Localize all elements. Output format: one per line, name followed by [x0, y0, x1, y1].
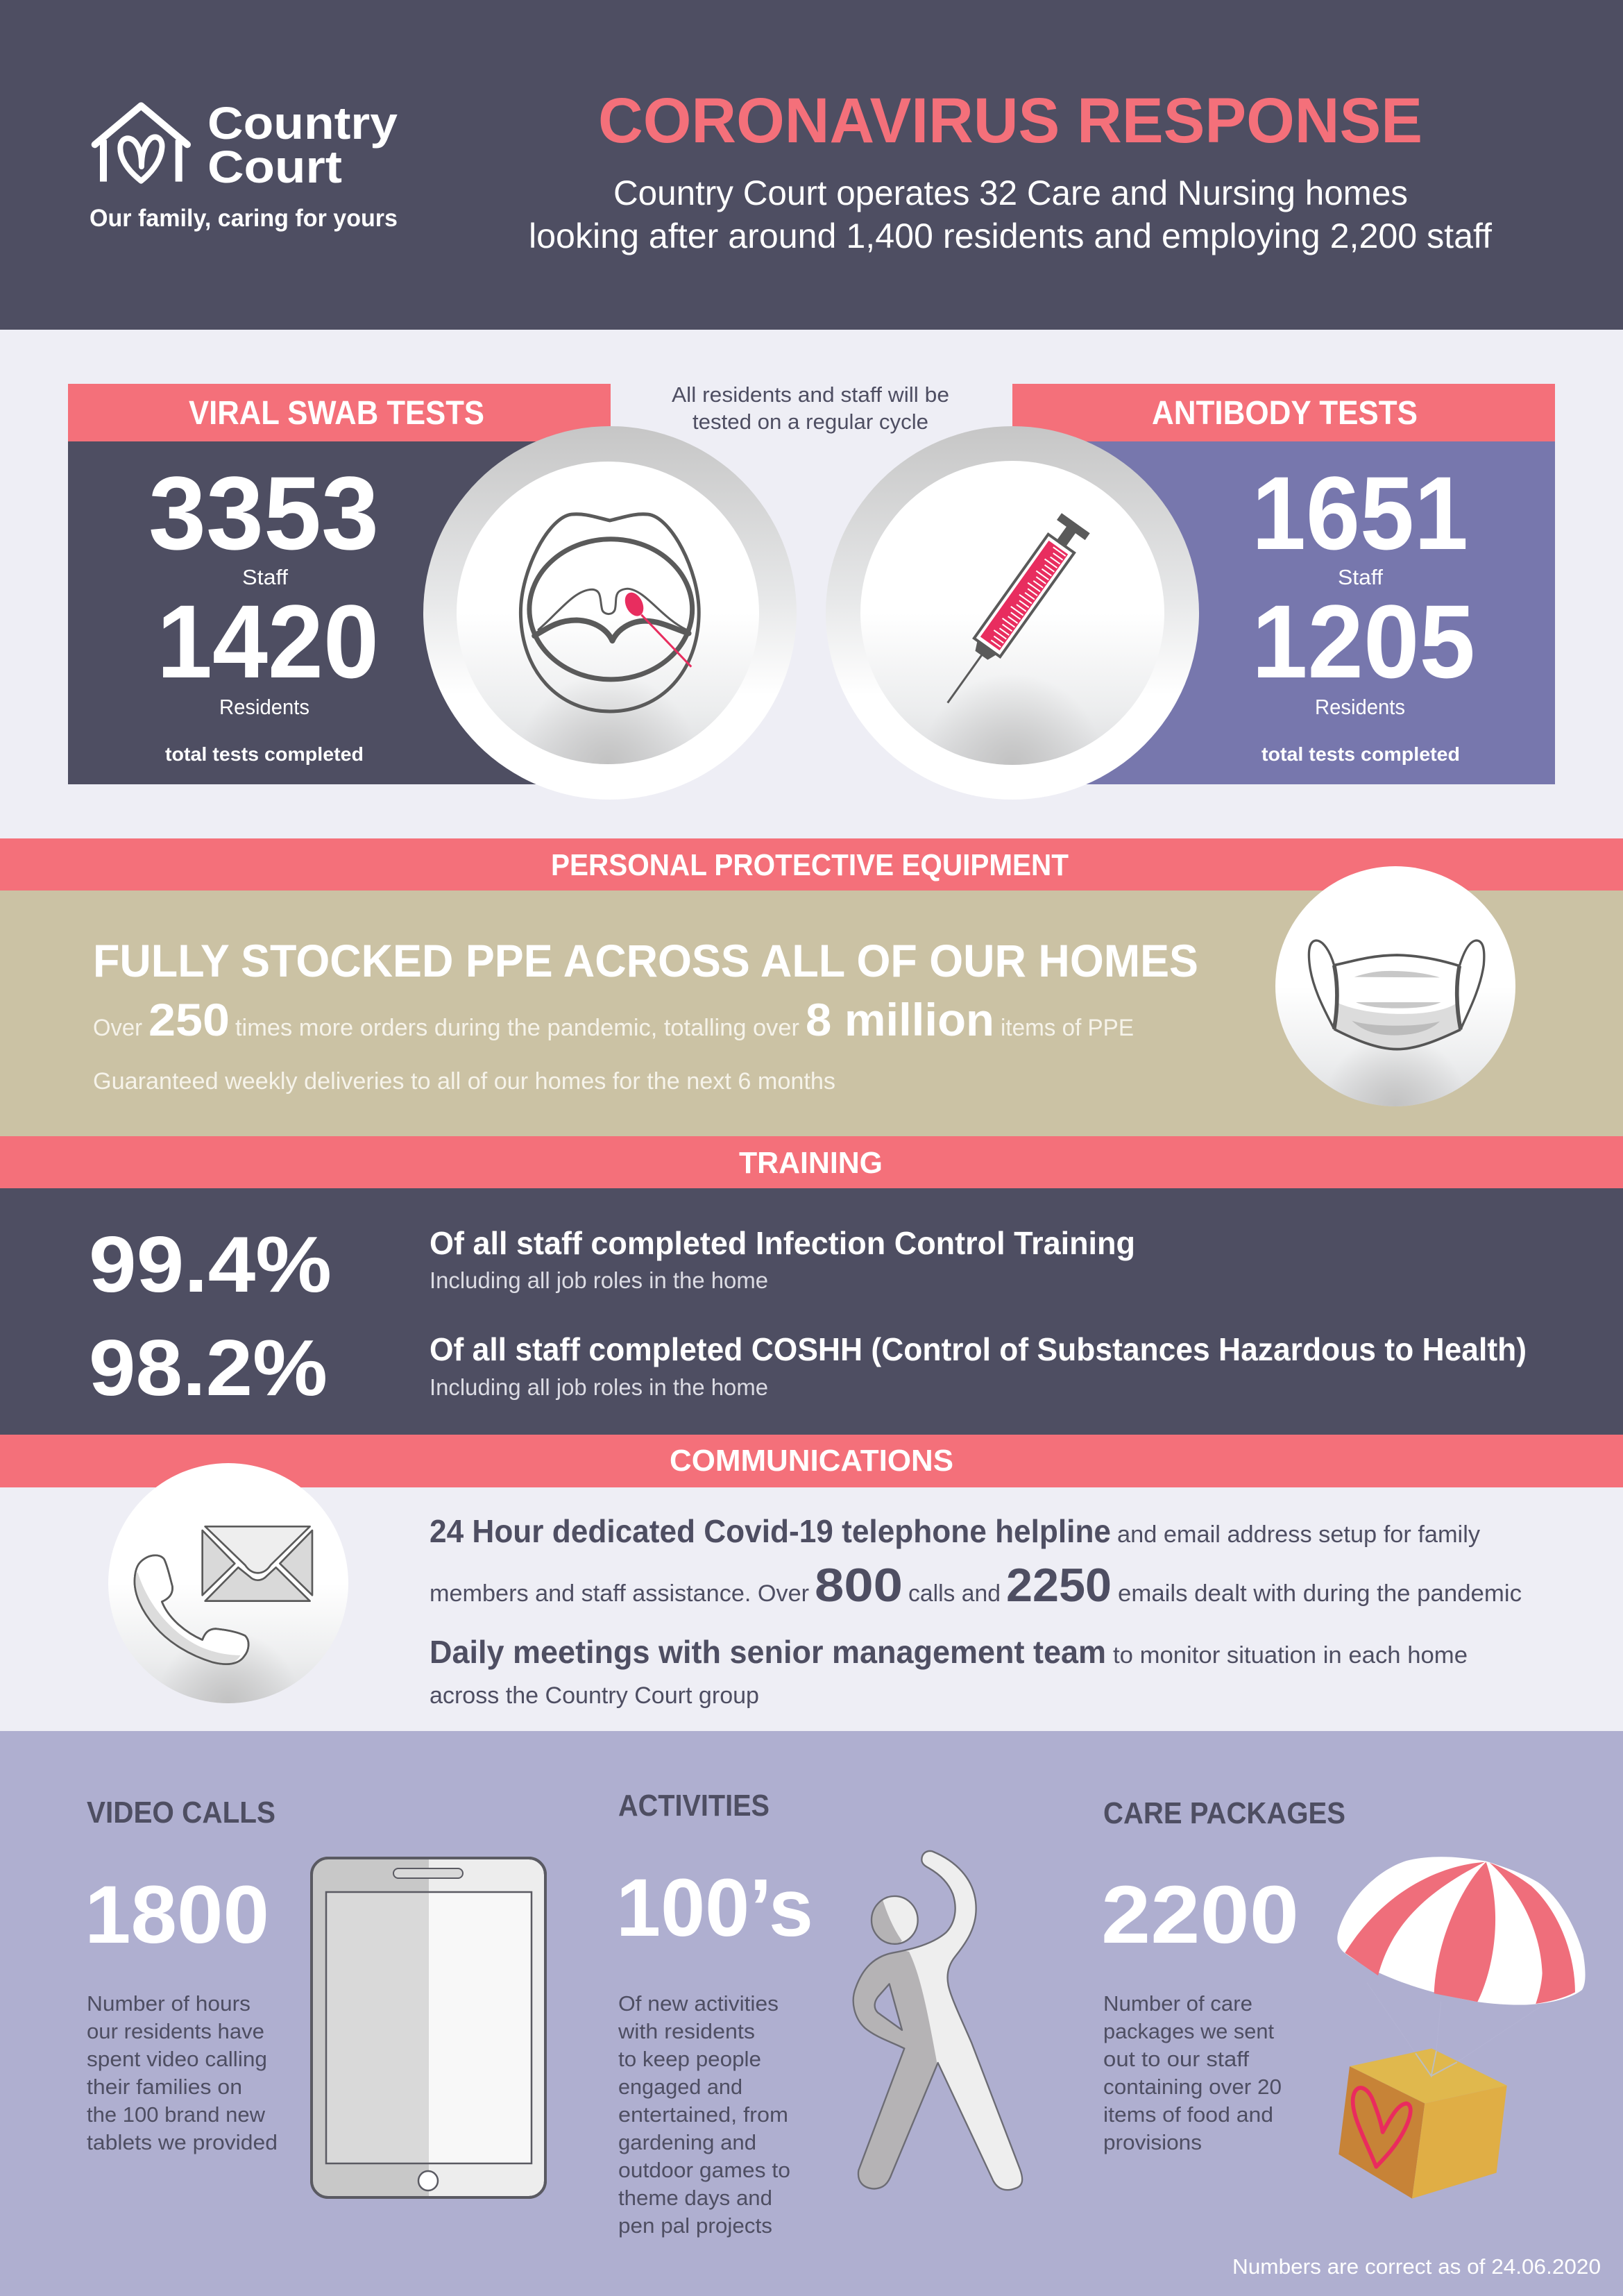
centre note: All residents and staff will be: [672, 382, 949, 407]
heading: PPE: PERSONAL PROTECTIVE EQUIPMENT: [551, 848, 1069, 882]
helpline text: 24 Hour dedicated Covid-19 telephone helpline: [430, 1513, 1111, 1549]
icon: parachute with care package: [1337, 1857, 1586, 2199]
video calls description: [87, 1991, 278, 2154]
stat: COSHH training: Of all staff completed COSHH (Control of Substances Hazardous to Health): [430, 1331, 1527, 1367]
centre note: tested on a regular cycle: [692, 410, 928, 434]
video calls description: Number of hours: [87, 1991, 250, 2016]
stat: COSHH training: Including all job roles in the home: [430, 1374, 768, 1400]
heading: activities: ACTIVITIES: [618, 1789, 770, 1823]
daily meetings text: to monitor situation in each home: [1113, 1642, 1468, 1669]
activities description: with residents: [618, 2019, 755, 2043]
caption: total tests completed: [1261, 743, 1460, 765]
logo: Country Court: [90, 97, 398, 232]
video calls description: spent video calling: [87, 2047, 267, 2071]
stat: infection control training: [89, 1221, 1135, 1309]
header subtitle: [529, 174, 1492, 255]
title: CORONAVIRUS RESPONSE: [598, 85, 1422, 156]
PPE stats line: items of PPE: [1001, 1015, 1134, 1041]
heading: viral swab tests: VIRAL SWAB TESTS: [189, 395, 484, 432]
activities description: pen pal projects: [618, 2213, 772, 2238]
helpline text: 2250: [1006, 1559, 1112, 1612]
PPE deliveries line: Guaranteed weekly deliveries to all of our homes for the next 6 months: [93, 1068, 835, 1095]
icon: phone and envelope in circle: [108, 1463, 348, 1703]
care packages description: packages we sent: [1103, 2019, 1274, 2043]
column: activities: [616, 1789, 1022, 2238]
panel: training: [0, 1136, 1623, 1435]
care packages description: containing over 20: [1103, 2075, 1282, 2099]
helpline text: emails dealt with during the pandemic: [1118, 1580, 1522, 1607]
PPE stats line: Over: [93, 1015, 142, 1041]
stat: 2200: 2200: [1101, 1869, 1299, 1961]
panel: viral swab tests: [68, 384, 623, 784]
PPE stats line: [93, 994, 1134, 1045]
stat: infection control training: Including all job roles in the home: [430, 1267, 768, 1293]
PPE stats line: 8 million: [806, 994, 994, 1045]
helpline text: calls and: [908, 1580, 1001, 1607]
activities description: Of new activities: [618, 1991, 779, 2016]
care packages description: items of food and: [1103, 2102, 1273, 2127]
helpline text: members and staff assistance. Over: [430, 1580, 809, 1607]
daily meetings text: Daily meetings with senior management team: [430, 1634, 1106, 1670]
activities description: [618, 1991, 790, 2238]
activities description: engaged and: [618, 2075, 742, 2099]
header subtitle: looking after around 1,400 residents and employing 2,200 staff: [529, 217, 1492, 255]
heading: communications: COMMUNICATIONS: [670, 1444, 953, 1478]
centre note: [672, 382, 949, 434]
icon: syringe in circle: [826, 426, 1199, 800]
activities description: outdoor games to: [618, 2158, 790, 2182]
stat: staff swab tests: 3353: [148, 455, 379, 571]
heading: care packages: CARE PACKAGES: [1103, 1796, 1345, 1830]
footnote: Numbers are correct as of 24.06.2020: [1232, 2254, 1601, 2279]
icon: mouth swab in circle: [423, 426, 797, 800]
PPE stats line: 250: [148, 994, 230, 1045]
stat: COSHH training: [89, 1324, 1527, 1412]
video calls description: their families on: [87, 2075, 242, 2099]
activities description: to keep people: [618, 2047, 761, 2071]
daily meetings text: across the Country Court group: [430, 1682, 759, 1709]
video calls description: our residents have: [87, 2019, 264, 2043]
stat: infection control training: Of all staff completed Infection Control Training: [430, 1225, 1135, 1261]
panel: personal protective equipment: [0, 838, 1623, 1136]
panel: bottom stats: [0, 1731, 1623, 2296]
care packages description: provisions: [1103, 2130, 1202, 2154]
stat: staff antibody tests: 1651: [1252, 455, 1468, 571]
activities description: gardening and: [618, 2130, 756, 2154]
helpline text: and email address setup for family: [1117, 1521, 1480, 1548]
header subtitle: Country Court operates 32 Care and Nursing homes: [613, 174, 1408, 212]
heading: training: TRAINING: [739, 1146, 883, 1180]
header band: [0, 0, 1623, 330]
daily meetings text: [430, 1634, 1468, 1709]
helpline text: [430, 1513, 1522, 1612]
helpline text: 800: [815, 1559, 903, 1612]
stat: resident antibody tests: Residents: [1315, 695, 1405, 719]
stat: resident swab tests: 1420: [157, 583, 379, 700]
heading: antibody tests: ANTIBODY TESTS: [1152, 395, 1418, 432]
video calls description: the 100 brand new: [87, 2102, 266, 2127]
activities description: entertained, from: [618, 2102, 788, 2127]
video calls description: tablets we provided: [87, 2130, 278, 2154]
column: video calls: [85, 1796, 545, 2197]
logo: Country Court: Court: [207, 141, 342, 192]
PPE stats line: times more orders during the pandemic, totalling over: [235, 1015, 799, 1041]
caption: total tests completed: [165, 743, 364, 765]
logo: Country Court: Country: [207, 97, 398, 149]
care packages description: [1103, 1991, 1282, 2154]
stat: infection control training: 99.4%: [89, 1221, 332, 1309]
stat: resident swab tests: Residents: [219, 695, 309, 719]
stat: resident antibody tests: 1205: [1252, 583, 1475, 700]
activities description: theme days and: [618, 2186, 772, 2210]
heading: video calls: VIDEO CALLS: [87, 1796, 275, 1830]
icon: face mask in circle: [1275, 866, 1515, 1106]
stat: staff swab tests: Staff: [242, 565, 288, 589]
icon: stretching person: [853, 1851, 1022, 2190]
stat: 100's: 100’s: [616, 1862, 813, 1954]
icon: house with heart: [95, 105, 187, 182]
stat: 1800: 1800: [85, 1869, 269, 1961]
stat: COSHH training: 98.2%: [89, 1324, 328, 1412]
PPE headline: FULLY STOCKED PPE ACROSS ALL OF OUR HOMES: [93, 935, 1198, 986]
stat: staff antibody tests: Staff: [1338, 565, 1383, 589]
care packages description: Number of care: [1103, 1991, 1252, 2016]
column: care packages: [1101, 1796, 1586, 2199]
logo: Country Court: Our family, caring for yours: [90, 205, 398, 232]
care packages description: out to our staff: [1103, 2047, 1249, 2071]
panel: communications: [0, 1435, 1623, 1709]
panel: antibody tests: [999, 384, 1555, 784]
icon: tablet: [312, 1858, 545, 2197]
